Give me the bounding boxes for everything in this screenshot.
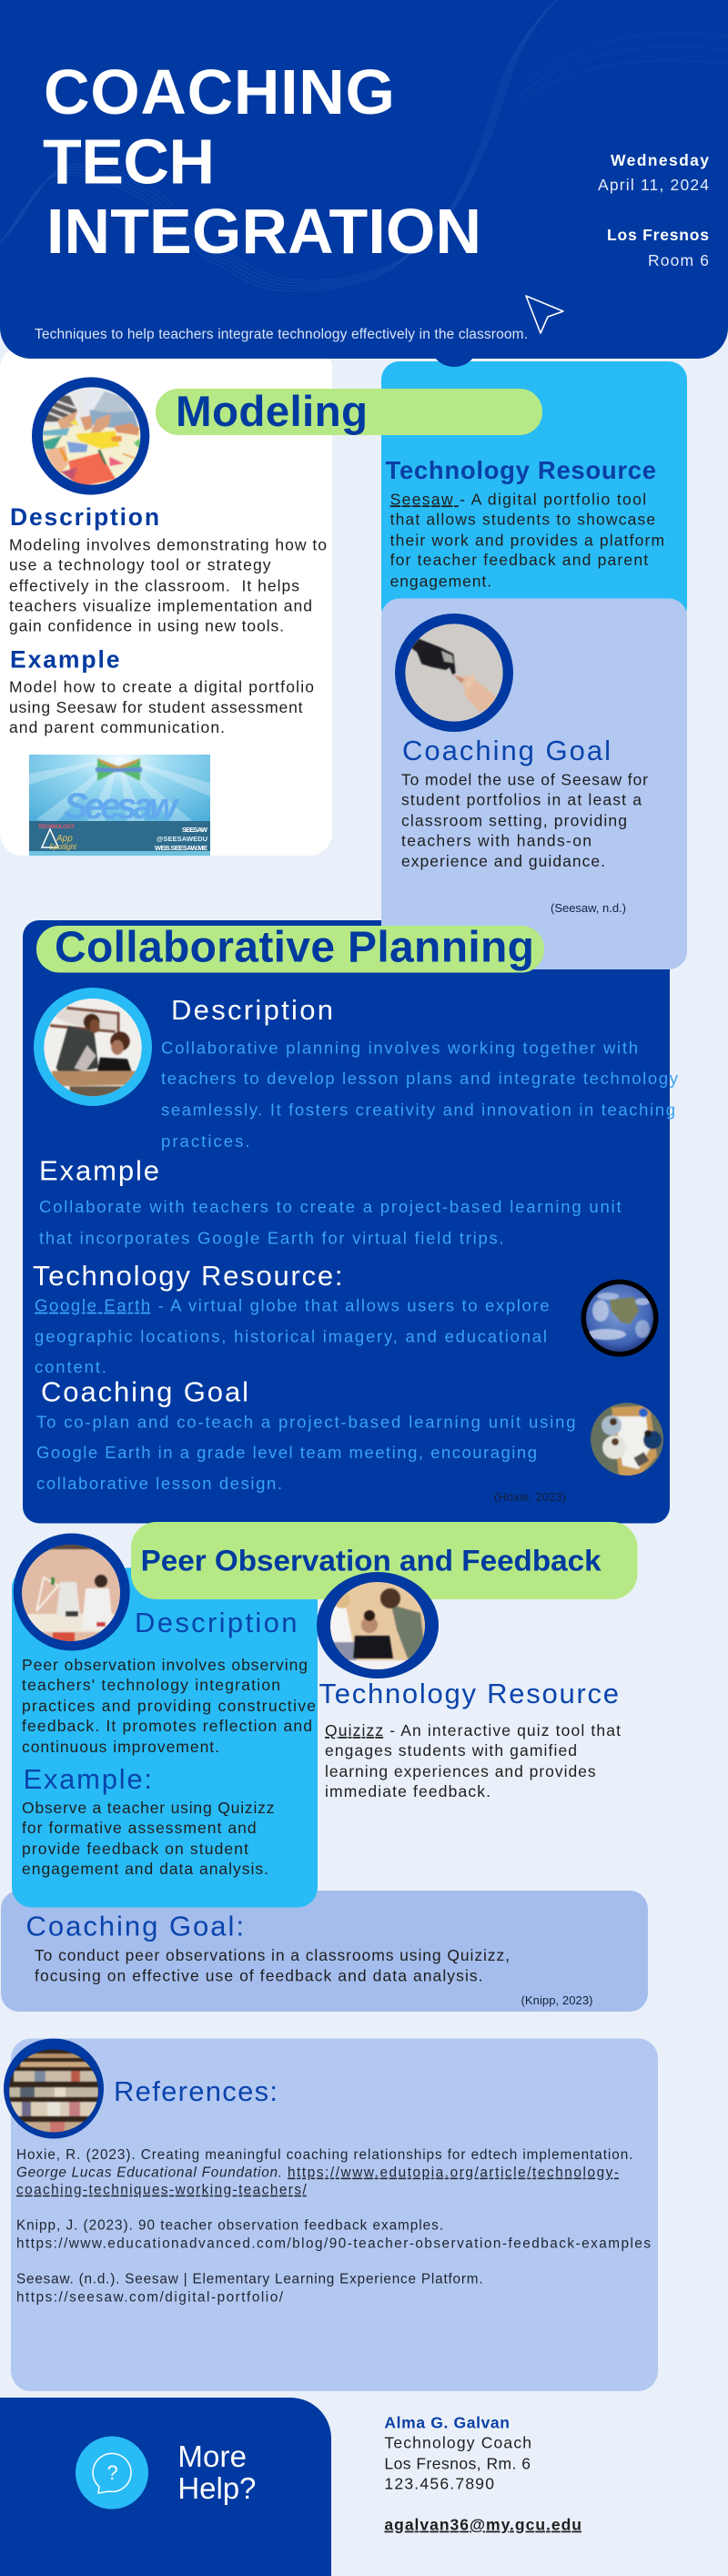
- date and location: Room 6: [648, 251, 709, 269]
- date and location: Los Fresnos: [607, 226, 709, 244]
- text: modeling coaching goal body: classroom setting, providing: [401, 811, 627, 829]
- text: collaborative example body: that incorporates Google Earth for virtual field trips.: [39, 1228, 504, 1247]
- text: peer example body: Observe a teacher using Quizizz: [22, 1799, 275, 1817]
- icon: question speech bubble: [76, 2436, 148, 2509]
- text: Seesaw resource body: Seesaw - A digital portfolio tool: [390, 490, 646, 508]
- panel: references: [11, 2039, 658, 2391]
- text: peer coaching goal body: To conduct peer observations in a classrooms using Quizizz,: [35, 1946, 510, 1964]
- date and location: Wednesday: [611, 151, 709, 169]
- text: peer description body: teachers' technology integration: [22, 1676, 280, 1694]
- text: peer description body: feedback. It promotes reflection and: [22, 1717, 312, 1735]
- panel: modeling description: [0, 346, 332, 856]
- text: reference list: Seesaw. (n.d.). Seesaw | Elementary Learning Experience Platform.: [16, 2271, 483, 2287]
- text: collaborative description body: teachers to develop lesson plans and integrate technology: [161, 1069, 679, 1088]
- heading: collaborative description: Description: [171, 994, 333, 1026]
- section heading: Modeling: [156, 388, 542, 436]
- text: Quizizz resource body: learning experiences and provides: [325, 1762, 596, 1780]
- text: Quizizz resource body: [325, 1721, 621, 1800]
- text: modeling description body: use a technology tool or strategy: [9, 555, 271, 573]
- section heading: Peer Observation and Feedback: Peer Observation and Feedback: [141, 1544, 602, 1577]
- text: reference list: https://www.educationadvanced.com/blog/90-teacher-observation-feedback-examples: [16, 2236, 651, 2251]
- text: modeling example body: [9, 677, 314, 736]
- text: more help: [177, 2439, 256, 2505]
- section heading: Peer Observation and Feedback: [131, 1522, 637, 1599]
- text: collaborative description body: Collaborative planning involves working together with: [161, 1038, 638, 1057]
- title: TECH: [43, 126, 215, 197]
- text: reference list: Knipp, J. (2023). 90 teacher observation feedback examples.: [16, 2218, 443, 2234]
- text: collaborative coaching goal body: To co-plan and co-teach a project-based learning unit using: [36, 1413, 576, 1431]
- section heading: Modeling: Modeling: [176, 388, 368, 436]
- image: Seesaw app spotlight: WEB.SEESAW.ME: [155, 844, 207, 852]
- title: COACHING: [44, 56, 395, 127]
- text: modeling coaching goal body: [401, 770, 648, 870]
- heading: peer coaching goal: Coaching Goal:: [25, 1910, 244, 1942]
- text: peer description body: continuous improvement.: [22, 1738, 219, 1756]
- text: collaborative description body: practices.: [161, 1131, 249, 1151]
- heading: collaborative coaching goal: Coaching Goal: [41, 1376, 248, 1407]
- text: Seesaw resource body: engagement.: [390, 572, 491, 590]
- heading: references: References:: [114, 2075, 278, 2107]
- text: reference list: coaching-techniques-working-teachers/: [16, 2183, 307, 2198]
- date and location: [598, 151, 709, 269]
- text: Quizizz resource body: engages students with gamified: [325, 1741, 577, 1760]
- citation: Hoxie: (Hoxie, 2023): [494, 1490, 566, 1504]
- text: Seesaw resource body: [390, 490, 664, 590]
- text: peer description body: [22, 1656, 316, 1756]
- text: reference list: https://seesaw.com/digital-portfolio/: [16, 2290, 284, 2306]
- image: Seesaw app spotlight: Seesaw: [64, 786, 180, 827]
- text: reference list: https://www.edutopia.org/article/technology-: [288, 2165, 619, 2181]
- text: contact details: 123.456.7890: [384, 2474, 494, 2492]
- text: peer example body: engagement and data analysis.: [22, 1860, 268, 1878]
- photo: three people at a laptop: [317, 1572, 439, 1678]
- text: peer example body: [22, 1799, 275, 1878]
- image: Seesaw app spotlight: Spotlight: [49, 843, 77, 851]
- citation: Seesaw: (Seesaw, n.d.): [551, 901, 626, 915]
- photo: teacher and student with laptop: [34, 988, 152, 1106]
- panel: modeling technology resource: [381, 361, 687, 625]
- photo: lab scientists: [14, 1533, 130, 1651]
- section heading: Collaborative Planning: Collaborative Planning: [55, 923, 534, 971]
- text: Google Earth resource body: content.: [35, 1357, 106, 1376]
- heading: collaborative technology resource: Technology Resource:: [33, 1260, 342, 1292]
- text: Google Earth resource body: [35, 1296, 550, 1376]
- text: modeling example body: Model how to create a digital portfolio: [9, 677, 314, 695]
- image: Seesaw app spotlight: App: [56, 834, 73, 844]
- text: more help: Help?: [177, 2471, 256, 2505]
- panel: collaborative planning: [23, 920, 670, 1524]
- text: collaborative example body: [39, 1197, 622, 1247]
- heading: modeling example: Example: [10, 646, 120, 674]
- panel: modeling coaching goal: [381, 599, 687, 969]
- text: more help: More: [177, 2439, 247, 2473]
- subtitle: Techniques to help teachers integrate technology effectively in the classroom.: [35, 327, 528, 342]
- text: contact details: agalvan36@my.gcu.edu: [384, 2516, 581, 2534]
- text: contact details: Technology Coach: [384, 2434, 531, 2452]
- panel: more help footer: [0, 2398, 331, 2576]
- text: peer coaching goal body: [35, 1946, 510, 1984]
- text: Google Earth resource body: geographic locations, historical imagery, and educational: [35, 1326, 547, 1345]
- image: Seesaw app spotlight: SEESAW: [182, 826, 208, 834]
- text: collaborative example body: Collaborate with teachers to create a project-based learning unit: [39, 1197, 622, 1216]
- photo: robot hand touching human finger: [395, 614, 513, 732]
- text: peer example body: provide feedback on student: [22, 1840, 248, 1858]
- photo: team meeting from above: [591, 1403, 663, 1479]
- text: Seesaw resource body: for teacher feedback and parent: [390, 551, 648, 569]
- panel: peer observation description: [12, 1567, 318, 1908]
- text: peer description body: Peer observation involves observing: [22, 1656, 308, 1674]
- text: modeling coaching goal body: To model the use of Seesaw for: [401, 770, 648, 788]
- text: reference list: George Lucas Educational Foundation.: [16, 2165, 282, 2181]
- panel: peer observation coaching goal: [1, 1891, 648, 2012]
- date and location: April 11, 2024: [598, 176, 709, 194]
- text: collaborative description body: seamlessly. It fosters creativity and innovation in teaching: [161, 1100, 675, 1120]
- image: Seesaw app spotlight: [29, 755, 210, 857]
- citation: Knipp: (Knipp, 2023): [521, 1993, 593, 2007]
- text: collaborative coaching goal body: Google Earth in a grade level team meeting, encouraging: [36, 1443, 537, 1462]
- icon: question speech bubble: ?: [107, 2461, 118, 2484]
- text: modeling coaching goal body: experience and guidance.: [401, 852, 605, 870]
- text: modeling description body: [9, 535, 327, 635]
- text: contact details: [384, 2414, 581, 2534]
- text: modeling example body: using Seesaw for student assessment: [9, 698, 303, 716]
- text: collaborative coaching goal body: [36, 1413, 576, 1493]
- text: modeling coaching goal body: student portfolios in at least a: [401, 790, 642, 808]
- text: peer description body: practices and providing constructive: [22, 1697, 316, 1715]
- title: INTEGRATION: [46, 196, 481, 267]
- text: peer example body: for formative assessment and: [22, 1819, 257, 1837]
- text: modeling example body: and parent communication.: [9, 718, 225, 736]
- heading: collaborative example: Example: [39, 1155, 159, 1187]
- photo: Earth globe: [581, 1280, 659, 1356]
- text: peer coaching goal body: focusing on effective use of feedback and data analysis.: [35, 1966, 483, 1984]
- heading: modeling description: Description: [10, 503, 159, 531]
- text: modeling description body: effectively in the classroom. It helps: [9, 576, 299, 594]
- photo: bookshelves: [4, 2039, 104, 2139]
- title: [43, 56, 481, 267]
- heading: modeling technology resource: Technology Resource: [386, 456, 656, 484]
- text: Seesaw resource body: their work and provides a platform: [390, 532, 664, 550]
- header banner: [0, 0, 728, 367]
- text: Seesaw resource body: that allows students to showcase: [390, 510, 655, 528]
- heading: modeling coaching goal: Coaching Goal: [402, 735, 611, 766]
- text: Google Earth resource body: Google Earth - A virtual globe that allows users to explore: [35, 1296, 550, 1315]
- text: modeling description body: gain confidence in using new tools.: [9, 617, 284, 635]
- text: reference list: Hoxie, R. (2023). Creating meaningful coaching relationships for edtech implementation.: [16, 2147, 632, 2163]
- heading: peer description: Description: [135, 1607, 297, 1638]
- image: Seesaw app spotlight: @SEESAWEDU: [157, 835, 207, 843]
- text: modeling coaching goal body: teachers with hands-on: [401, 831, 592, 849]
- text: collaborative coaching goal body: collaborative lesson design.: [36, 1474, 282, 1493]
- text: modeling description body: teachers visualize implementation and: [9, 596, 312, 614]
- photo: hands with coloured paper: [32, 377, 149, 495]
- heading: peer technology resource: Technology Resource: [318, 1678, 619, 1709]
- text: Quizizz resource body: immediate feedback.: [325, 1782, 490, 1800]
- heading: peer example: Example:: [24, 1763, 152, 1795]
- text: modeling description body: Modeling involves demonstrating how to: [9, 535, 327, 553]
- text: contact details: Alma G. Galvan: [384, 2414, 510, 2432]
- text: collaborative description body: [161, 1038, 679, 1151]
- text: Quizizz resource body: Quizizz - An interactive quiz tool that: [325, 1721, 621, 1739]
- icon: cursor arrow: [526, 296, 563, 333]
- image: Seesaw app spotlight: TECHNOLOGY: [38, 825, 75, 830]
- text: contact details: Los Fresnos, Rm. 6: [384, 2455, 531, 2473]
- text: reference list: [16, 2147, 651, 2306]
